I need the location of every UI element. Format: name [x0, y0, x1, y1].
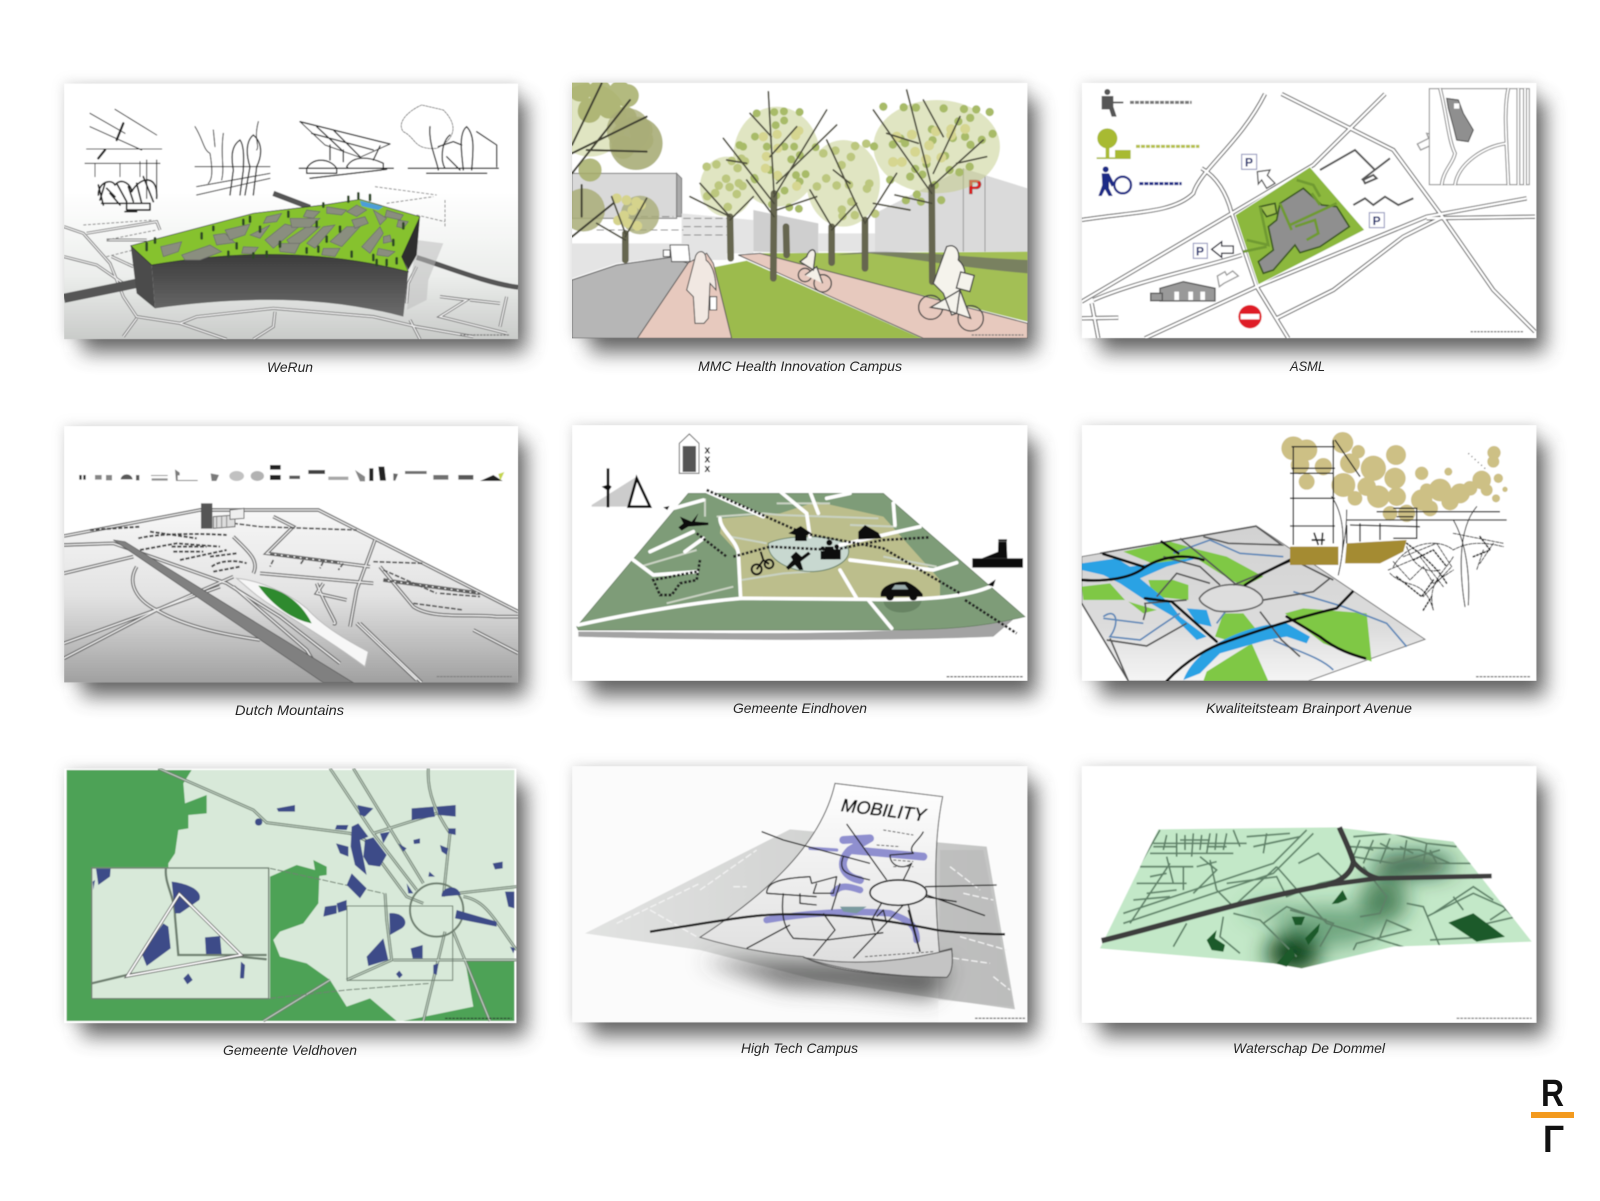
truck depot [1151, 282, 1215, 301]
ring road [410, 883, 463, 937]
inset map [92, 868, 269, 999]
road map base [64, 222, 507, 339]
icon strip [79, 465, 503, 481]
grey roads [1082, 526, 1333, 681]
panel: MMC Health Innovation Campus [553, 83, 1028, 338]
roads entering block [64, 193, 518, 298]
logo: R [1541, 1073, 1564, 1115]
credit mark [437, 675, 512, 678]
icon: plane [678, 513, 708, 531]
ochre tree canopy [1281, 432, 1508, 522]
green campus top [131, 199, 420, 272]
sketch: tree with people [401, 105, 498, 173]
white mountain ribbon [237, 578, 368, 667]
map sheet shadow [578, 617, 1017, 640]
caption: High Tech Campus: High Tech Campus [741, 1040, 858, 1056]
panel: ASML [1082, 83, 1537, 338]
olive urban area [720, 502, 940, 598]
caption: Gemeente Eindhoven: Gemeente Eindhoven [733, 700, 867, 716]
panel: Gemeente Veldhoven [64, 768, 517, 1023]
navy urban blocks [255, 805, 515, 978]
panel: Waterschap De Dommel [1082, 766, 1537, 1023]
dashed rail lines [653, 490, 1017, 633]
motorway band [113, 540, 353, 683]
buildings [572, 168, 1028, 260]
panel: Gemeente Eindhoven [572, 425, 1028, 681]
legend icon: figure with waste bin [1098, 166, 1131, 196]
green areas [1082, 542, 1372, 681]
map plane [1082, 526, 1425, 681]
panel: Kwaliteitsteam Brainport Avenue [1082, 425, 1537, 681]
footpath [637, 253, 732, 338]
main road [650, 914, 1005, 934]
credit mark [971, 334, 1024, 336]
no entry sign [1238, 305, 1262, 328]
panel: High Tech Campus [572, 766, 1028, 1023]
right lawn [757, 252, 1028, 322]
paper curl [803, 949, 952, 977]
city fabric [90, 527, 247, 572]
icon: mine tower [972, 539, 1023, 568]
parking signs [1193, 154, 1384, 258]
cyclist far [919, 246, 983, 331]
cyclist near [798, 250, 831, 292]
van [663, 245, 690, 262]
secondary streets [640, 498, 937, 603]
foliage washes [553, 83, 1000, 227]
handwritten title: MOBILITY [840, 795, 929, 826]
legend icon: person at desk [1102, 89, 1123, 117]
triangle site [127, 894, 241, 976]
caption: MMC Health Innovation Campus: MMC Health Innovation Campus [698, 358, 902, 374]
sketched trees [1332, 497, 1503, 610]
caption: WeRun: WeRun [267, 359, 313, 375]
curl shadow [700, 960, 950, 998]
street grid [1123, 830, 1527, 957]
panel: Dutch Mountains [64, 426, 518, 683]
white roads [578, 490, 990, 628]
icon: Amsterdam canal house: x [704, 444, 710, 456]
icon: car [881, 582, 923, 601]
blue streams [1103, 540, 1407, 670]
green site [1235, 167, 1365, 285]
icon: cyclist [752, 552, 773, 574]
sketch: two people by tree [195, 122, 270, 195]
route network [747, 824, 997, 958]
green mountain top [258, 586, 312, 623]
icon: school roof [788, 526, 812, 541]
central ring [870, 880, 927, 905]
pedestrian [687, 252, 717, 323]
caption: Gemeente Veldhoven: Gemeente Veldhoven [223, 1042, 357, 1058]
site buildings [1258, 188, 1349, 273]
icon: train [858, 525, 882, 539]
location inset map [1429, 88, 1529, 185]
forest areas [67, 770, 514, 1021]
credit mark [975, 1016, 1025, 1020]
icon: Rotterdam skyline [592, 468, 650, 507]
road [572, 257, 688, 338]
foliage [562, 90, 997, 234]
green map sheet [577, 493, 1025, 630]
raised block sides [131, 246, 155, 308]
icon: Amsterdam canal house [679, 434, 710, 475]
centre square [768, 537, 849, 572]
adjacent buildings outline [1320, 150, 1413, 205]
icon: Amsterdam canal house: x [704, 463, 710, 475]
panel: WeRun [64, 83, 518, 339]
ochre plinths [1290, 547, 1338, 565]
paper sheet [700, 783, 952, 977]
icon: Amsterdam canal house: x [704, 454, 710, 466]
black main roads [1082, 542, 1365, 681]
central lawn [713, 261, 922, 338]
aerial map sheet [585, 829, 1015, 1009]
locator frame [347, 906, 453, 980]
legend icon: tree and bench [1097, 128, 1131, 159]
parking signs: P [1196, 244, 1204, 258]
sketch: people under roof [85, 109, 162, 212]
caption: Kwaliteitsteam Brainport Avenue: Kwaliteitsteam Brainport Avenue [1206, 700, 1412, 716]
credit mark [445, 1017, 512, 1020]
motorway [1102, 827, 1353, 941]
credit mark [1476, 675, 1531, 679]
campus buildings [161, 205, 408, 260]
parking signs: P [1245, 156, 1253, 170]
dark ponds [1207, 890, 1505, 967]
blue water [1082, 557, 1310, 680]
cycle path [738, 253, 1028, 338]
purple corridor [767, 838, 923, 940]
credit mark [1457, 1016, 1532, 1020]
sketch: solar carport [299, 122, 393, 178]
parking signs: P [1373, 214, 1381, 228]
figures on terrace [1312, 533, 1325, 545]
credit mark [460, 334, 510, 336]
caption: Dutch Mountains: Dutch Mountains [235, 702, 344, 718]
panel halos [64, 83, 1537, 1023]
icon: family [821, 540, 841, 559]
road network [64, 510, 518, 683]
green terrain [1100, 827, 1532, 968]
logo [1531, 1073, 1574, 1161]
building elevation [1290, 440, 1507, 545]
terrain shadows [1243, 854, 1453, 973]
road network [1082, 94, 1535, 338]
tower and buildings [201, 503, 244, 529]
panel shadows [82, 100, 1545, 1036]
tree trunks and branches [572, 83, 987, 282]
logo: Γ [1543, 1119, 1564, 1161]
arrows [1212, 133, 1437, 287]
caption: Waterschap De Dommel: Waterschap De Dommel [1233, 1040, 1386, 1056]
ground plane [64, 510, 518, 683]
credit mark [1471, 330, 1523, 334]
caption: ASML: ASML [1289, 358, 1325, 374]
icon: runner [786, 552, 811, 570]
ring road [1199, 585, 1263, 612]
main roads [158, 768, 517, 1021]
campus trees [147, 193, 403, 265]
red P sign: P [968, 176, 982, 199]
credit mark [947, 675, 1023, 679]
